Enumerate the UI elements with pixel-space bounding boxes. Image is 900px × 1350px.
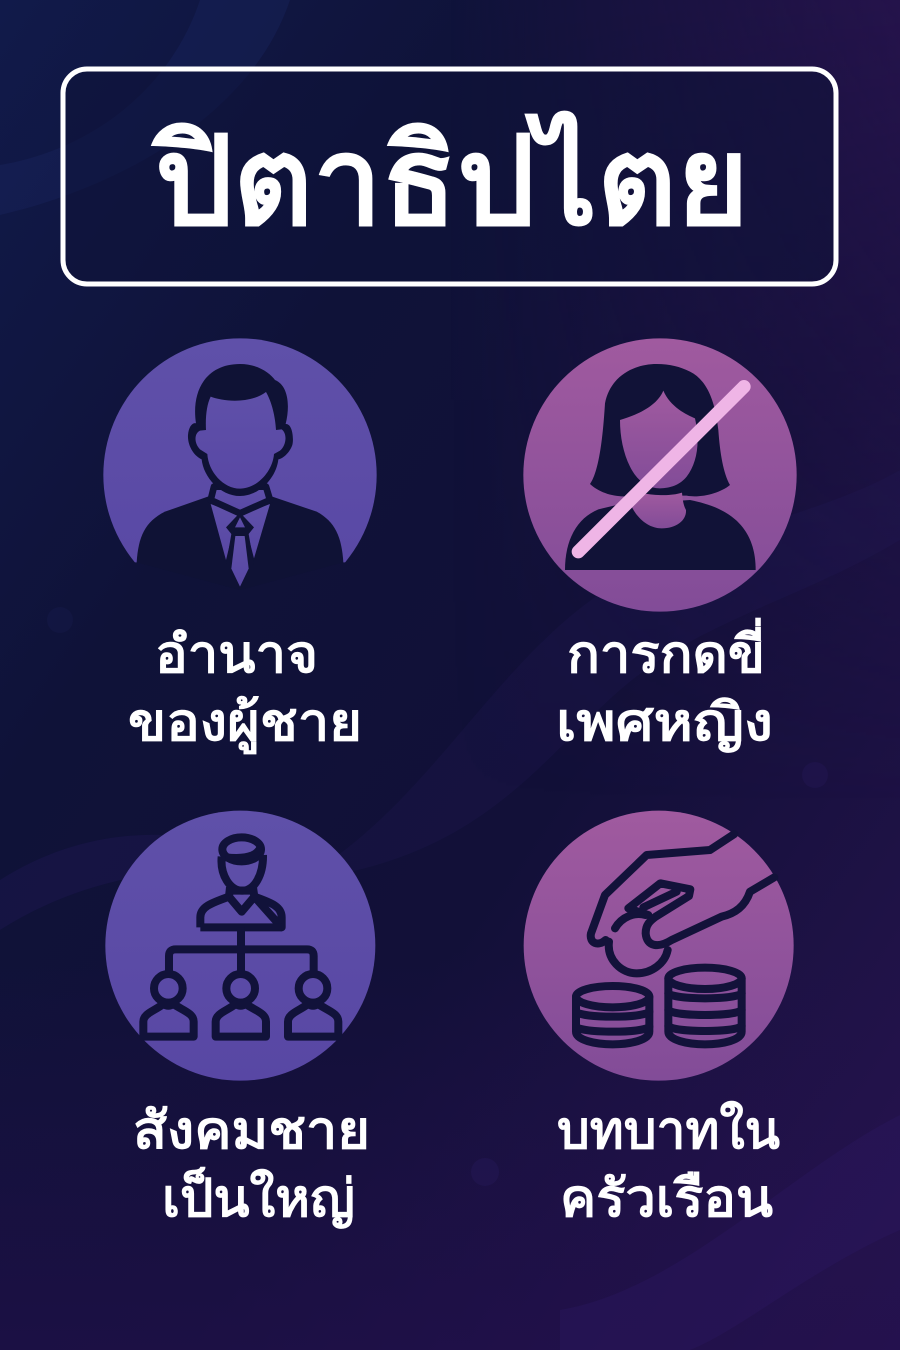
label: male power xyxy=(128,626,362,755)
label: oppression of women xyxy=(556,618,773,753)
panel: oppression of women xyxy=(523,338,797,753)
label: domestic role xyxy=(557,1100,780,1228)
panel: male power xyxy=(103,338,377,755)
label: male power: อำนาจ xyxy=(155,626,318,684)
label: male power: ของผู้ชาย xyxy=(128,694,362,755)
icon: businessman xyxy=(103,338,377,612)
label: oppression of women: เพศหญิง xyxy=(556,694,773,753)
label: oppression of women: การกดขี่ xyxy=(567,618,765,684)
label: domestic role: บทบาทใน xyxy=(557,1100,780,1160)
panel: domestic role xyxy=(524,811,794,1228)
label: male dominated society: สังคมชาย xyxy=(133,1102,370,1160)
panel: male dominated society xyxy=(105,811,375,1229)
icon: hand placing coin on stacks xyxy=(524,811,794,1081)
label: male dominated society xyxy=(133,1102,370,1229)
title: ปิตาธิปไตย xyxy=(151,111,749,251)
icon: woman crossed out xyxy=(523,338,797,612)
label: domestic role: ครัวเรือน xyxy=(560,1170,773,1228)
icon: hierarchy xyxy=(105,811,375,1081)
title xyxy=(63,69,836,284)
label: male dominated society: เป็นใหญ่ xyxy=(162,1167,355,1229)
